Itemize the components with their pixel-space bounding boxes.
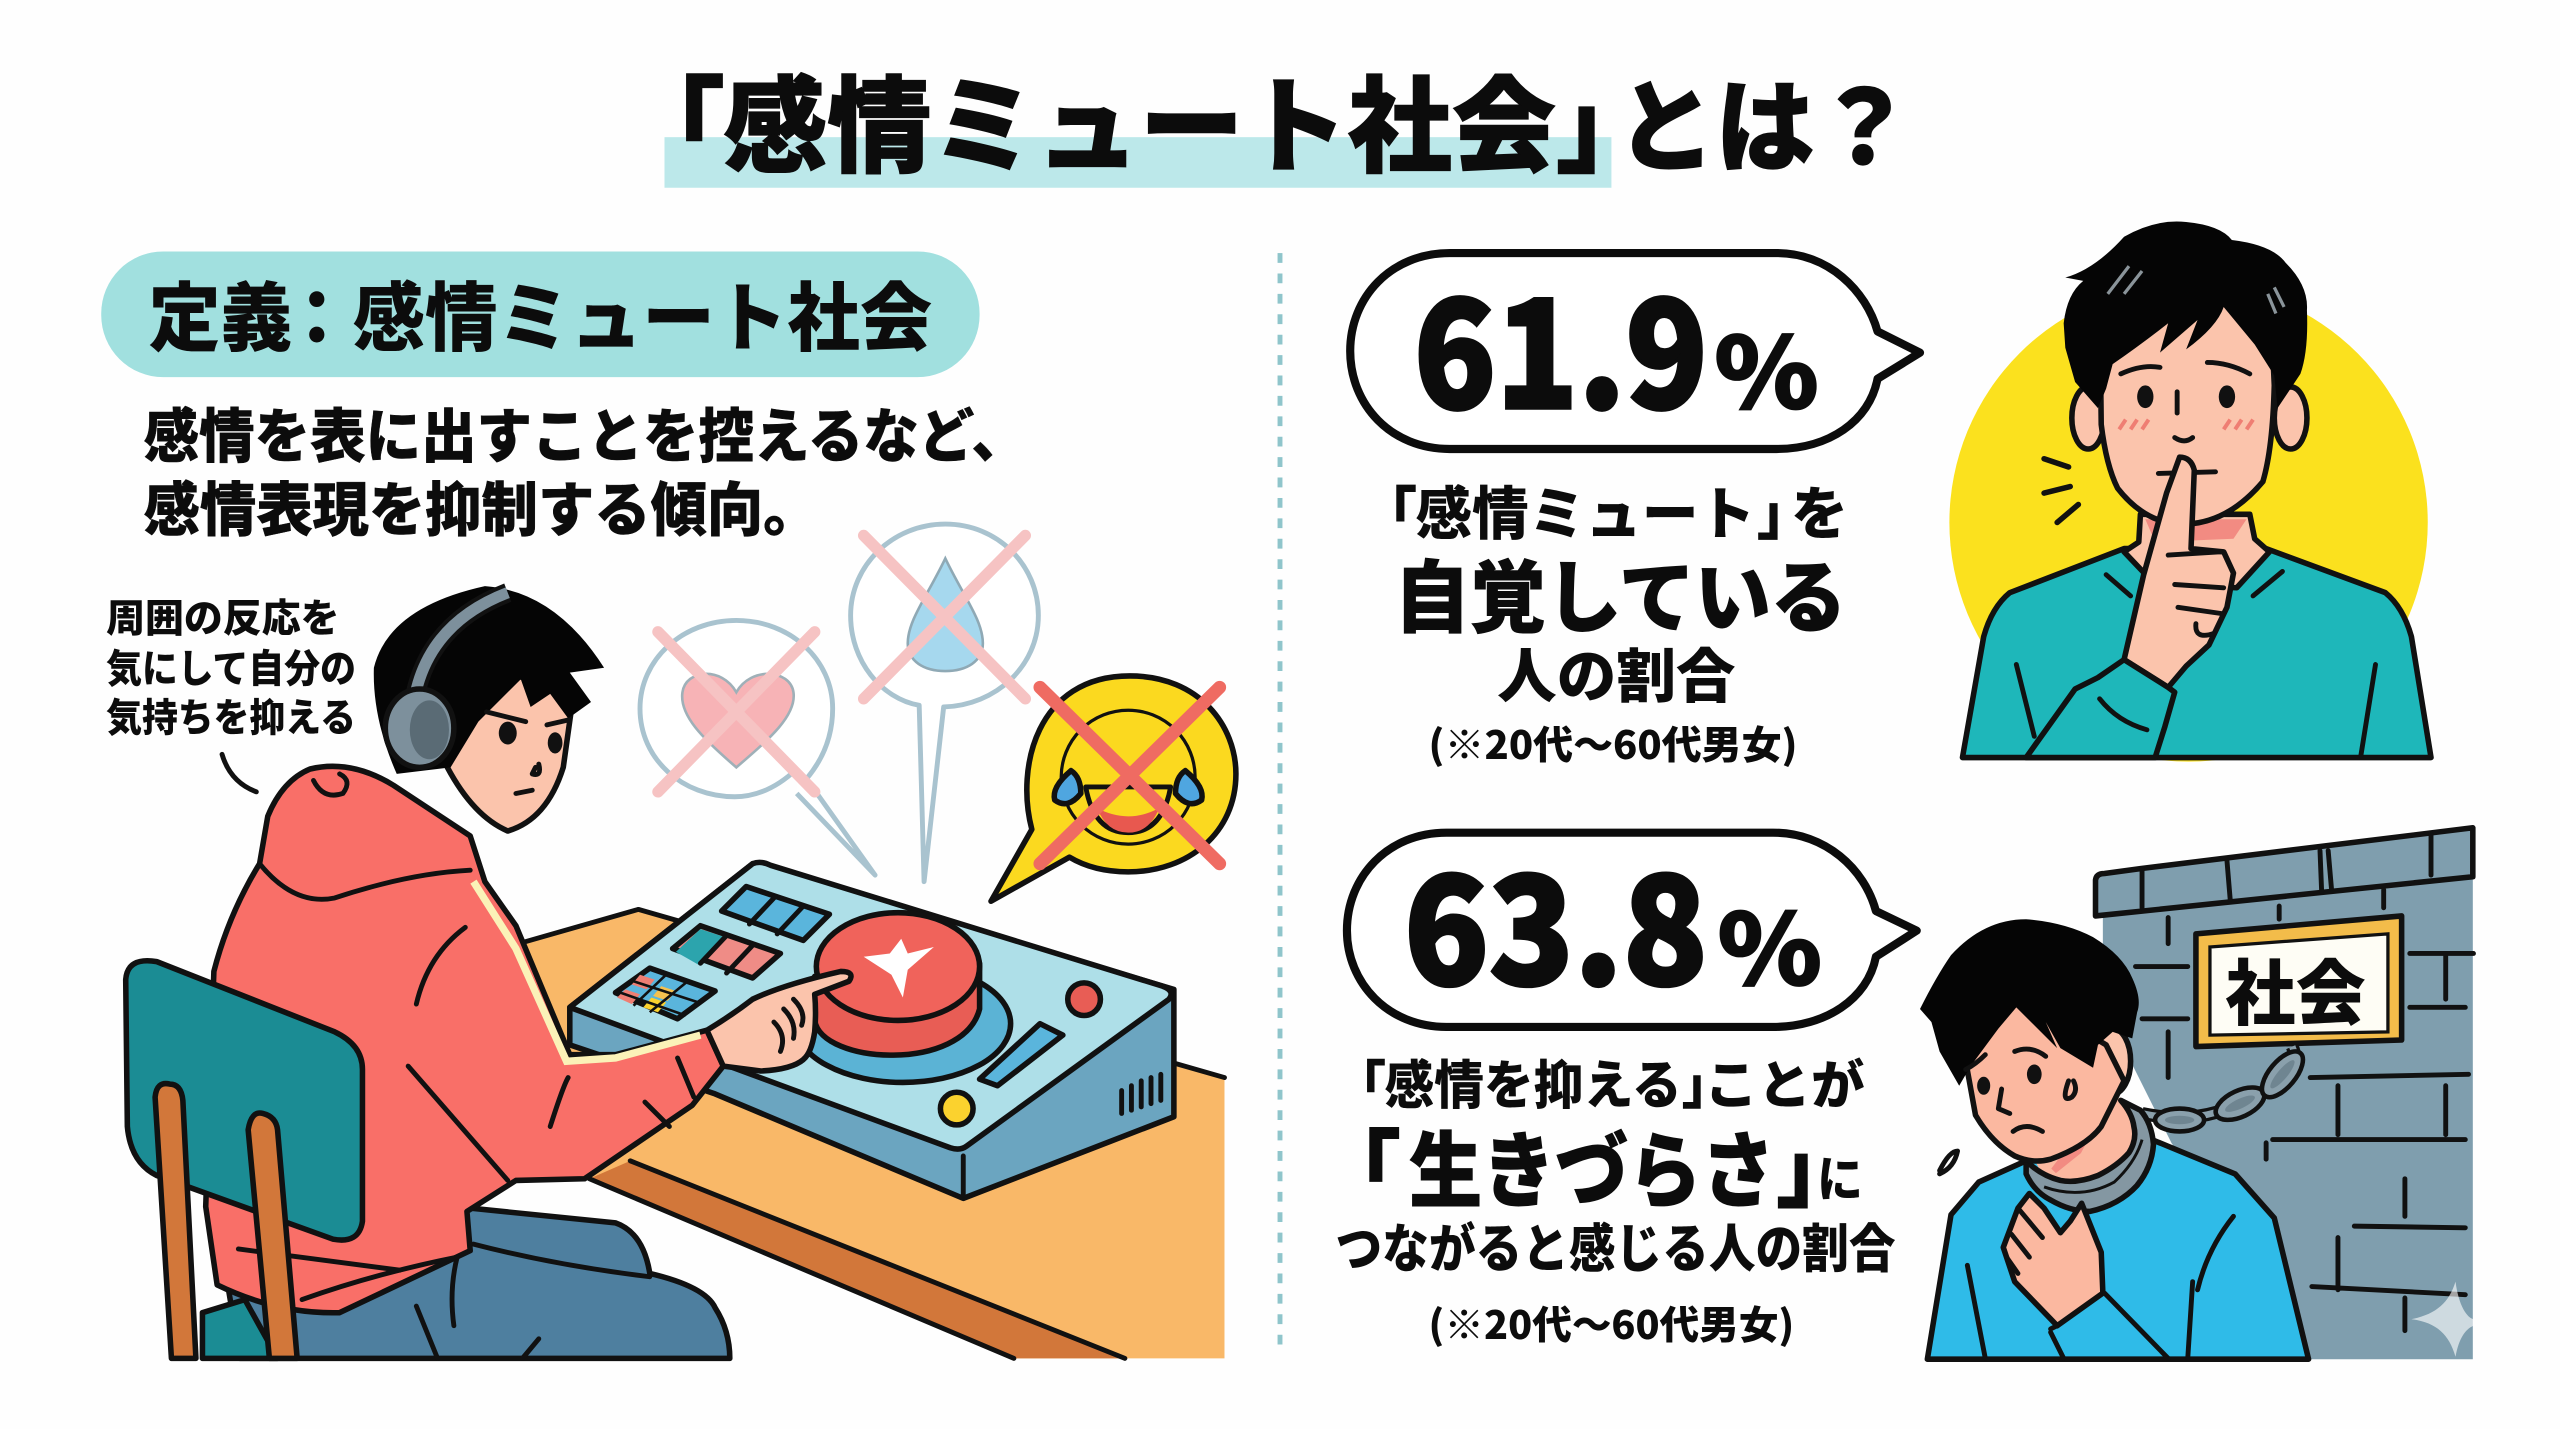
stat block 2 [1316,815,1917,1351]
sleeve details [1967,1216,2233,1358]
illustration: man chained to society wall [1920,828,2473,1359]
chair [126,961,362,1358]
left caption: 気にして自分の [106,638,356,694]
society sign [2196,916,2402,1047]
heading pill: definition: 定義 [149,257,292,366]
heading pill: definition: ： [281,257,353,366]
caption 1: (※20代～60代男女) [1429,715,1798,771]
sweater [1962,549,2431,758]
neck and collar [2026,1097,2153,1211]
stat block 1 [1350,239,1920,771]
left caption: 気持ちを抑える [106,687,356,743]
caption 1: 人の割合 [1497,629,1736,714]
title: 感情ミュート社会 [723,43,1556,194]
watermark sparkle [2411,1282,2473,1357]
caption 2: 」 [1682,1044,1734,1120]
speech bubble: tear crossed out [851,524,1038,882]
neck [2124,514,2269,588]
hand with finger [2124,457,2233,687]
caption 2: 「 [1316,1103,1401,1225]
number 61.9%: 61.9 [1414,239,1708,451]
vertical dashed divider [1278,253,1282,1355]
desk [524,909,1224,1358]
hand on chest [2003,1193,2103,1326]
society sign: 社会 [2225,936,2366,1040]
motion marks [2044,459,2078,522]
head with headphones [374,586,604,831]
caption 2: 「 [1334,1044,1386,1120]
face details [2119,362,2253,473]
motion mark [1940,1151,1958,1174]
number 61.9%: % [1714,295,1819,437]
caption 2: ことが [1704,1044,1864,1120]
caption 1: 」 [1757,469,1814,551]
left caption: 周囲の反応を [106,588,340,644]
brick wall [2096,828,2473,1359]
heading pill: definition: 感情ミュート社会 [353,257,932,366]
caption 1 [1360,469,1848,771]
speech bubble 61.9% [1350,253,1920,449]
caption 1: 自覚している [1394,534,1847,648]
title: 「 [620,43,725,194]
caption 2: (※20代～60代男女) [1429,1295,1794,1351]
title: 」 [1556,43,1660,194]
caption 2 [1316,1044,1896,1351]
number 63.8%: 63.8 [1404,815,1708,1027]
hand [707,971,851,1071]
ears [2072,387,2104,449]
caption 2: 生きづらさ [1409,1105,1775,1224]
heading pill: definition [101,251,980,377]
caption 2: 感情を抑える [1384,1044,1682,1120]
title: とは？ [1616,47,1913,193]
speech bubble: crying-laughing emoji crossed out [991,676,1236,901]
caption 2: 」 [1776,1103,1861,1225]
blue sweater [1927,1140,2309,1359]
ear [2095,1029,2131,1094]
face [2100,278,2274,524]
illustration: man with finger on lips [1949,222,2431,762]
definition text [144,389,1027,548]
hair [2064,222,2307,408]
caption 1: 感情ミュート [1416,469,1755,551]
chain [2142,1045,2310,1131]
speech bubble 63.8% [1347,833,1917,1027]
definition text: 感情を表に出すことを控えるなど、 [144,389,1027,474]
caption 1: 「 [1360,469,1417,551]
face details [1966,1049,2076,1131]
face [1966,996,2124,1161]
left caption [106,588,356,792]
hoodie [206,766,723,1313]
caption 2: つながると感じる人の割合 [1336,1207,1896,1283]
definition text: 感情表現を抑制する傾向。 [144,463,820,548]
speech bubble: heart crossed out [640,620,875,875]
caption 1: を [1791,469,1848,551]
caption 2: に [1817,1141,1863,1212]
title [620,43,1913,194]
illustration: person pressing mute button [126,524,1236,1358]
sleeve [2026,660,2175,758]
mixer console [570,862,1174,1198]
trousers [229,1208,730,1358]
hair [1920,919,2139,1086]
number 63.8%: % [1718,871,1822,1013]
